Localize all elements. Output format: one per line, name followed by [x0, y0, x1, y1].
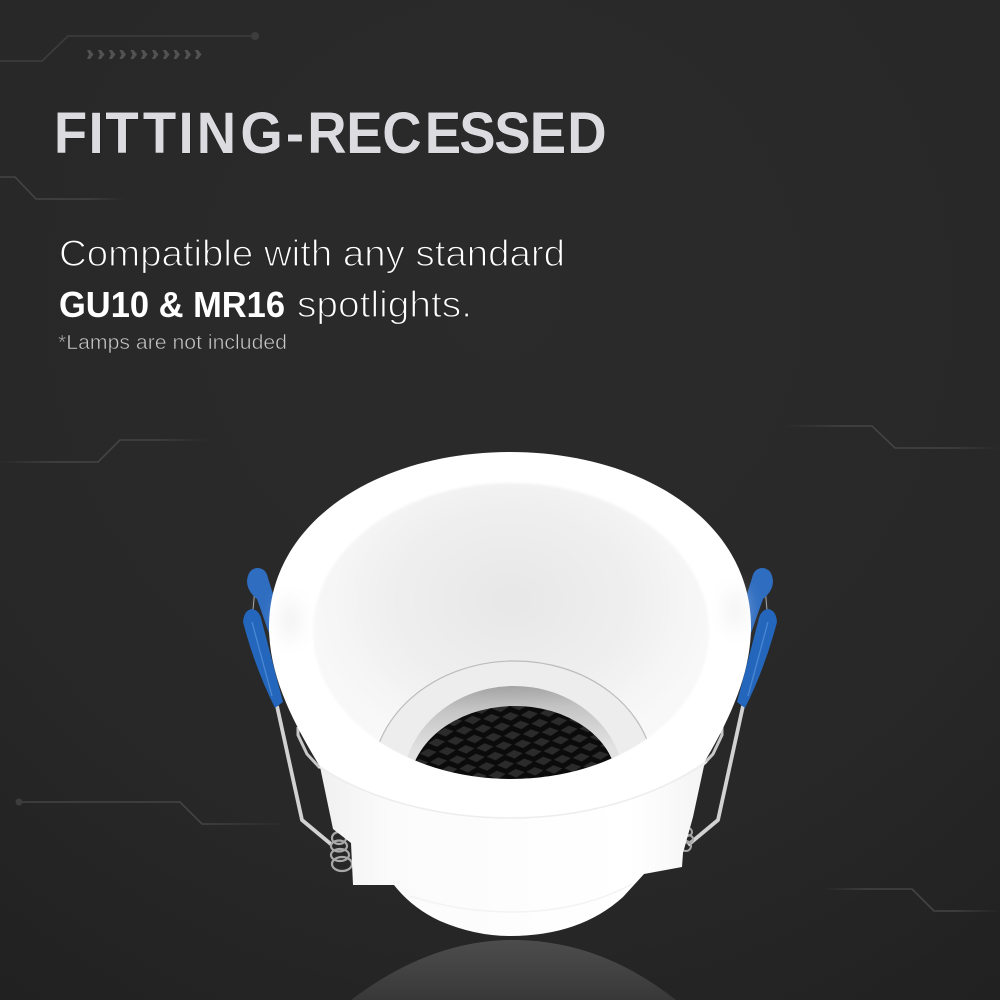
- decorative circuit line below title: [0, 177, 126, 199]
- spring clip right: [681, 568, 777, 851]
- spring clip left: [243, 568, 352, 871]
- inner base rings and honeycomb: [379, 660, 647, 779]
- subtitle line 2: spotlights.: [297, 284, 472, 325]
- subtitle line 1: Compatible with any standard: [59, 233, 565, 274]
- product: recessed spotlight fitting: [243, 452, 777, 936]
- body step edge: [410, 884, 632, 912]
- honeycomb grille: [415, 706, 612, 779]
- decorative circuit line top: [0, 32, 259, 61]
- footnote: *Lamps are not included: [58, 332, 287, 354]
- decorative circuit lines: [0, 426, 1000, 911]
- title: FITTING-RECESSED: [54, 100, 607, 165]
- chevron row: [87, 50, 202, 59]
- subtitle line 2: [59, 284, 472, 325]
- floor reflection: [351, 940, 676, 1000]
- subtitle line 2: GU10 & MR16: [59, 284, 285, 325]
- inner wall: [313, 483, 709, 779]
- outer rim: [269, 452, 751, 817]
- rim lower edge: [319, 762, 707, 818]
- lower body with mounting tabs: [319, 700, 707, 936]
- rim shading smudges: [280, 588, 744, 642]
